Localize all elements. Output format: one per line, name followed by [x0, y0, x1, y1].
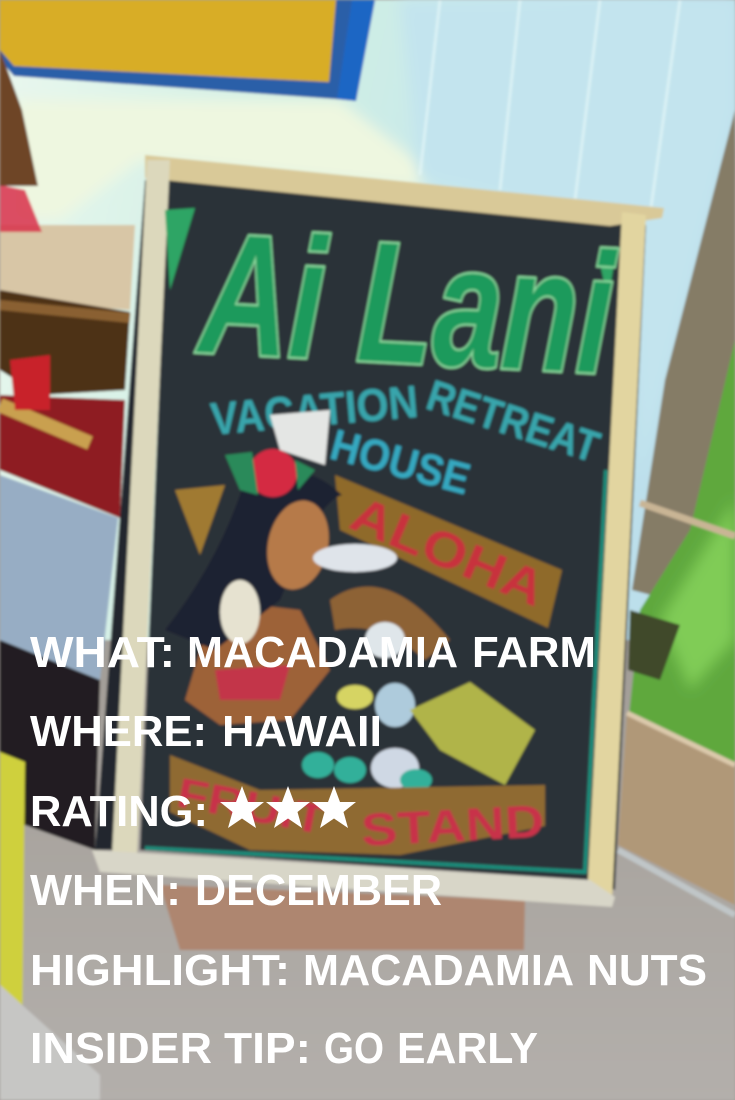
chalkboard sign: STAND — [360, 794, 545, 856]
hula woman — [175, 485, 225, 555]
chalkboard sign: RETREAT — [421, 371, 605, 473]
chalkboard sign: ALOHA — [343, 486, 553, 617]
when line — [30, 866, 442, 915]
chalkboard sign: FRUIT — [173, 769, 330, 844]
rating line: RATING: — [30, 787, 208, 836]
info list text overlay — [30, 628, 707, 1073]
wooden block under sign — [160, 885, 525, 950]
insider tip line: TIP: — [224, 1024, 311, 1073]
where line: HAWAII — [222, 707, 382, 756]
teal edge — [145, 470, 606, 872]
aloha banner — [335, 475, 562, 628]
hanging yellow sign with blue frame — [0, 0, 375, 101]
when line: WHEN: — [30, 866, 181, 915]
fruit basket — [330, 587, 450, 660]
market stand on left — [0, 50, 135, 1100]
quote marks — [165, 208, 195, 290]
fruit stand banner — [170, 755, 545, 855]
insider tip line: INSIDER — [30, 1024, 212, 1073]
what line: MACADAMIA — [187, 628, 458, 677]
board — [140, 180, 622, 880]
wall — [0, 0, 735, 640]
rating line — [30, 786, 356, 836]
highlight line: MACADAMIA — [303, 946, 574, 995]
rating stars — [220, 786, 356, 828]
where line: WHERE: — [30, 707, 207, 756]
what line: FARM — [472, 628, 596, 677]
ground — [0, 640, 735, 1100]
insider tip line: GO — [324, 1024, 384, 1073]
insider tip line — [30, 1024, 538, 1073]
when line: DECEMBER — [195, 866, 442, 915]
highlight line — [30, 946, 707, 995]
insider tip line: EARLY — [397, 1024, 538, 1073]
highlight line: NUTS — [587, 946, 707, 995]
highlight line: HIGHLIGHT: — [30, 946, 290, 995]
what line: WHAT: — [30, 628, 175, 677]
chalkboard sign — [92, 155, 664, 907]
bamboo frame — [145, 155, 664, 226]
lettering: vacation retreat house: VACATION — [208, 375, 420, 445]
where line — [30, 707, 382, 756]
tree, grass, rope and planter on right — [618, 110, 735, 915]
chalkboard sign: HOUSE — [325, 420, 475, 504]
what line — [30, 628, 596, 677]
